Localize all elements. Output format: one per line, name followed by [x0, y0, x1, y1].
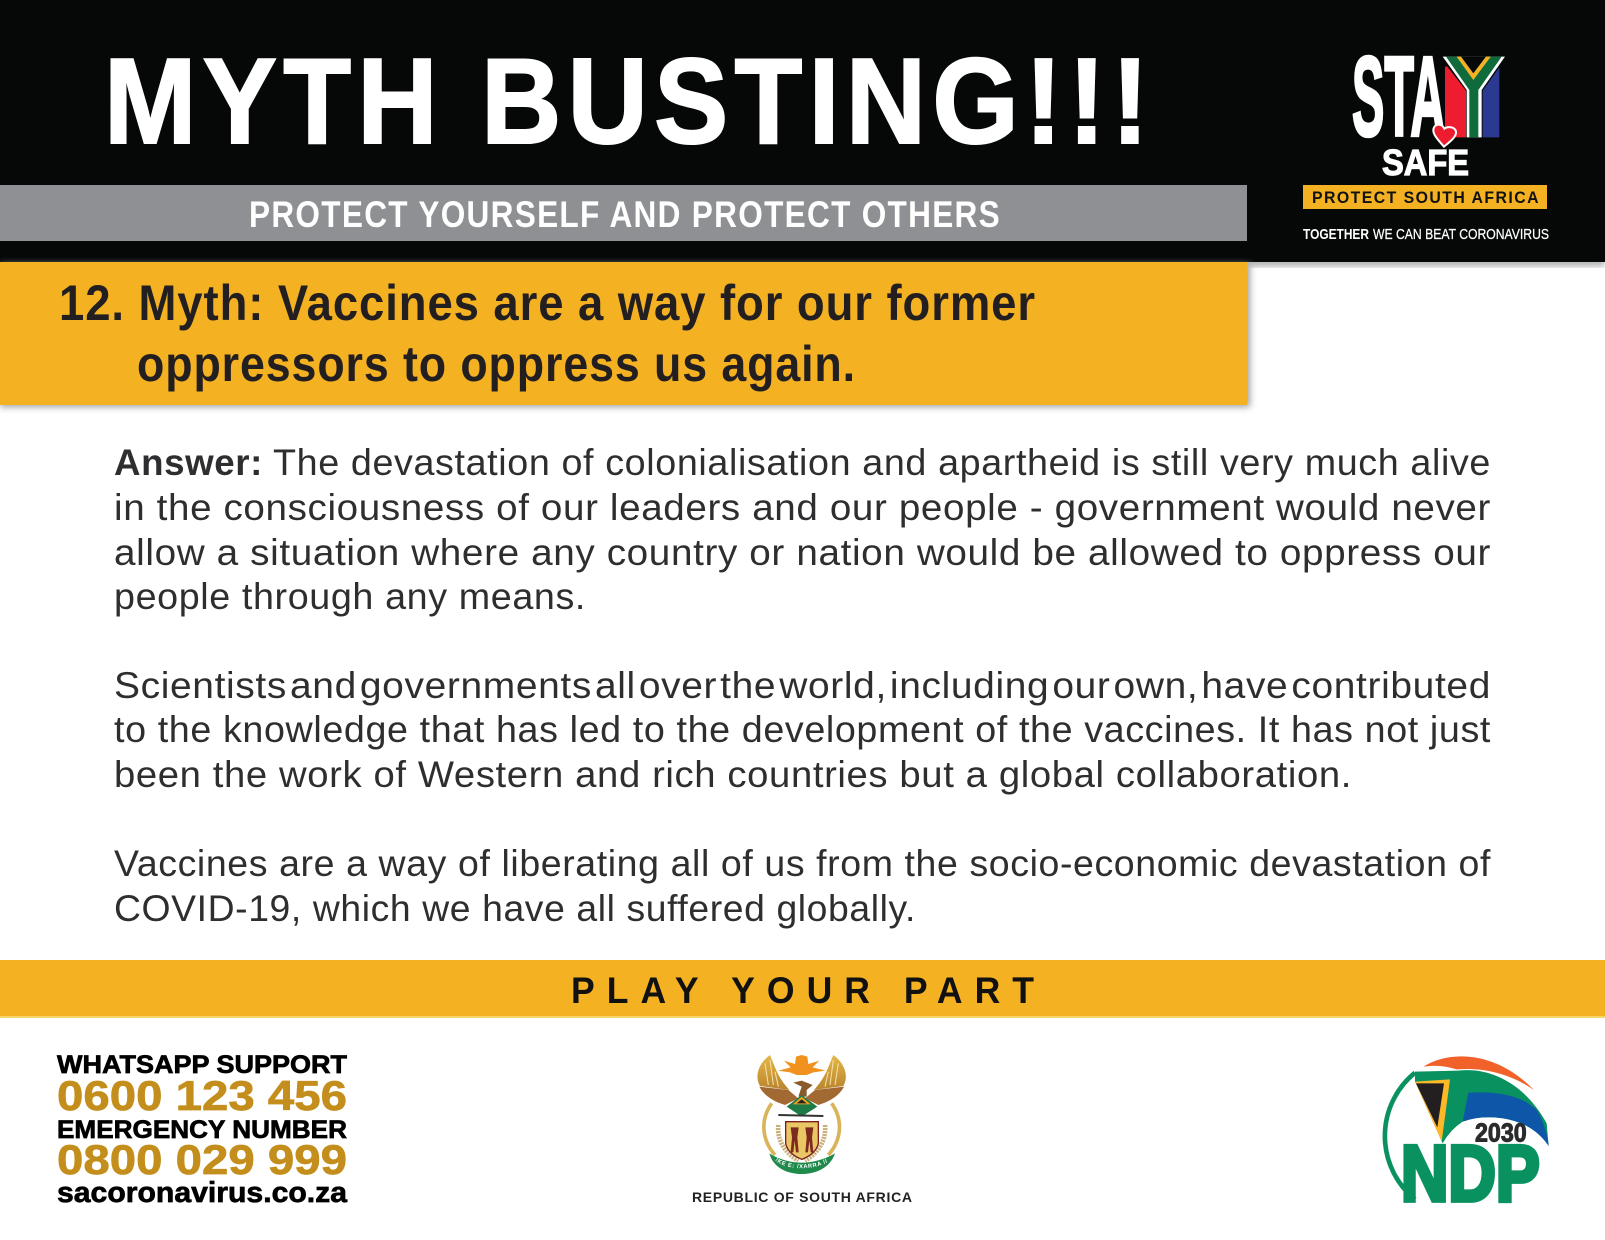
- logo tagline: WE CAN BEAT CORONAVIRUS: [1373, 226, 1549, 243]
- paragraph 2: [114, 665, 1491, 795]
- subtitle bar: [0, 185, 1247, 241]
- crest caption: REPUBLIC OF SOUTH AFRICA: [692, 1189, 912, 1205]
- blue swoosh: [1463, 1092, 1549, 1146]
- arcs: [764, 1103, 775, 1155]
- paragraph 1: allow a situation where any country or nation would be allowed to oppress our: [114, 532, 1491, 573]
- paragraph 2: to the knowledge that has led to the development of the vaccines. It has not just: [114, 709, 1491, 750]
- logo wordmark: STAY with flag: STA: [1352, 34, 1445, 161]
- logo: stay safe: [1303, 34, 1549, 243]
- contact block: 0800 029 999: [57, 1136, 347, 1183]
- paragraph 2: Scientists and governments all over the world, including our own, have contributed: [114, 665, 1491, 706]
- myth banner: oppressors to oppress us again.: [137, 336, 856, 392]
- wings: [757, 1055, 846, 1090]
- logo text: safe: SAFE: [1382, 142, 1469, 183]
- ribbon: [769, 1153, 835, 1174]
- shield: [786, 1122, 818, 1159]
- paragraph 3: [114, 843, 1491, 929]
- play your part bar: [0, 960, 1605, 1018]
- contact block: [57, 1051, 348, 1209]
- icon: coat of arms: [757, 1055, 846, 1174]
- paragraph 1: people through any means.: [114, 576, 586, 617]
- contact block: EMERGENCY NUMBER: [57, 1116, 347, 1144]
- ring: [1385, 1073, 1415, 1199]
- green swoosh: [1415, 1070, 1549, 1146]
- subtitle bar: PROTECT YOURSELF AND PROTECT OTHERS: [249, 194, 1001, 235]
- paragraph 2: been the work of Western and rich countries but a global collaboration.: [114, 754, 1352, 795]
- paragraph 1: The devastation of colonialisation and apartheid is still very much alive: [273, 442, 1491, 483]
- sun: [778, 1055, 826, 1075]
- title: MYTH BUSTING!!!: [104, 33, 1155, 169]
- contact block: 0600 123 456: [57, 1072, 347, 1119]
- logo tagline: TOGETHER: [1303, 226, 1369, 243]
- contact block: sacoronavirus.co.za: [57, 1177, 348, 1209]
- paragraph 3: Vaccines are a way of liberating all of us from the socio-economic devastation of: [114, 843, 1491, 884]
- spear: [778, 1115, 823, 1116]
- paragraph 1: [114, 442, 1491, 617]
- myth banner: 12. Myth: Vaccines are a way for our former: [59, 275, 1036, 331]
- wheat: [778, 1125, 798, 1161]
- paragraph 3: COVID-19, which we have all suffered globally.: [114, 888, 916, 929]
- diamond: [787, 1095, 817, 1117]
- icon: coat of arms: !KE E: /XARRA //KE: [776, 1158, 827, 1168]
- paragraph 1: Answer:: [114, 442, 263, 483]
- figures: [791, 1127, 813, 1152]
- header band: [0, 0, 1605, 266]
- bird: [793, 1081, 813, 1097]
- logo: ndp 2030: [1385, 1056, 1549, 1218]
- NDP: NDP: [1401, 1130, 1540, 1218]
- play your part bar: PLAY YOUR PART: [571, 970, 1046, 1011]
- orange arc: [1423, 1056, 1534, 1090]
- paragraph 1: in the consciousness of our leaders and our people - government would never: [114, 487, 1491, 528]
- logo strap: protect south africa: PROTECT SOUTH AFRICA: [1312, 189, 1540, 207]
- logo tagline: [1303, 226, 1549, 243]
- contact block: WHATSAPP SUPPORT: [57, 1051, 347, 1079]
- myth banner: [0, 262, 1250, 407]
- 2030: 2030: [1475, 1118, 1527, 1148]
- answer text: [114, 442, 1491, 929]
- triangle: [1415, 1079, 1450, 1142]
